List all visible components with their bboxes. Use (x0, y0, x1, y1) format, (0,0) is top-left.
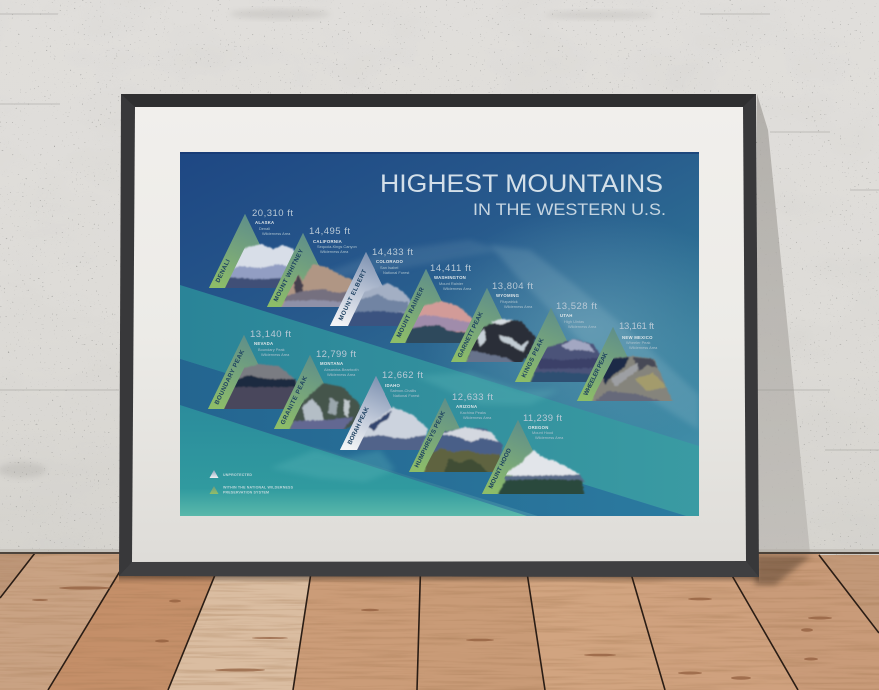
photo: Mount Elbert (346, 283, 411, 330)
photo: Granite Peak (288, 383, 360, 433)
stats: Borah Peak (382, 370, 423, 398)
stats: Mount Elbert: COLORADO (376, 259, 403, 264)
legend item: within the national wilderness preservation system (210, 486, 294, 494)
stats: Wheeler Peak: NEW MEXICO (622, 335, 653, 340)
label strip: Humphreys Peak: HUMPHREYS PEAK (414, 410, 447, 469)
photo: Humphreys Peak (423, 427, 503, 476)
stats: Denali: Denali (259, 226, 270, 231)
label strip: Mount Hood: MOUNT HOOD (488, 447, 513, 490)
stats: Mount Whitney: CALIFORNIA (313, 239, 342, 244)
stats: Granite Peak: Absaroka-Beartooth (324, 367, 359, 372)
stats: Mount Hood: Mount Hood (532, 430, 553, 435)
legend item: within the national wilderness preservation system: PRESERVATION SYSTEM (223, 490, 269, 494)
stats: Mount Hood: Wilderness Area (535, 435, 564, 440)
peak: Wheeler Peak (577, 321, 674, 405)
photo: Mount Hood (496, 450, 585, 498)
title: HIGHEST MOUNTAINS (380, 170, 663, 198)
stats: Boundary Peak: NEVADA (254, 341, 273, 346)
label strip: Boundary Peak: BOUNDARY PEAK (214, 348, 246, 406)
stats: Denali: Wilderness Area (262, 231, 291, 236)
stats: Denali (252, 208, 293, 236)
stats: Garnett Peak (492, 282, 533, 308)
stats: Borah Peak: National Forest (393, 393, 420, 398)
photo: Mount Rainier (405, 300, 472, 343)
stats: Mount Elbert: 14,433 ft (372, 247, 413, 258)
photo: Boundary Peak (222, 364, 297, 413)
white mat (132, 107, 746, 562)
stats: Mount Whitney: 14,495 ft (309, 226, 350, 237)
wooden floor planks (0, 552, 879, 690)
stats: Borah Peak: Salmon-Challis (390, 388, 416, 393)
peak: Mount Elbert (330, 247, 413, 330)
stats: Mount Rainier: 14,411 ft (430, 263, 471, 274)
peak: Garnett Peak (451, 281, 536, 366)
stats: Granite Peak: MONTANA (320, 361, 343, 366)
legend (210, 470, 294, 494)
label strip: Denali: DENALI (215, 258, 232, 284)
photo: Kings Peak (529, 339, 600, 386)
peak: Denali (209, 208, 297, 292)
stats: Wheeler Peak: Wheeler Peak (626, 340, 650, 345)
peak: Mount Rainier (390, 263, 475, 347)
stats: Granite Peak (316, 350, 358, 376)
stats: Humphreys Peak: 12,633 ft (452, 392, 493, 403)
stats: Garnett Peak: WYOMING (496, 293, 520, 298)
peak: Mount Hood (482, 413, 585, 498)
stats: Granite Peak: Wilderness Area (327, 372, 356, 377)
photo: Wheeler Peak (591, 356, 674, 405)
stats: Kings Peak (556, 302, 597, 328)
peak: Boundary Peak (208, 329, 297, 413)
stats: Mount Whitney: Sequoia-Kings Canyon (317, 244, 357, 249)
stats: Borah Peak: IDAHO (385, 383, 401, 388)
photo: Garnett Peak (465, 319, 536, 366)
stats: Boundary Peak: Boundary Peak (258, 347, 285, 352)
stats: Denali: 20,310 ft (252, 208, 293, 219)
stats: Boundary Peak: 13,140 ft (250, 329, 291, 340)
peak: Borah Peak (340, 370, 428, 454)
label strip: Garnett Peak: GARNETT PEAK (457, 310, 485, 359)
label strip: Granite Peak: GRANITE PEAK (280, 375, 309, 426)
stats: Mount Whitney (309, 226, 357, 254)
stats: Mount Hood: OREGON (528, 425, 549, 430)
stats: Mount Elbert: San Isabel (380, 265, 399, 270)
stats: Wheeler Peak: 13,161 ft (619, 321, 654, 332)
legend item: unprotected: UNPROTECTED (223, 473, 252, 477)
title (382, 174, 664, 215)
peak: Kings Peak (515, 301, 600, 386)
stats: Garnett Peak: Fitzpatrick (500, 299, 518, 304)
title: IN THE WESTERN U.S. (473, 200, 666, 219)
stats: Garnett Peak: 13,804 ft (492, 281, 533, 292)
stats: Mount Rainier: Wilderness Area (443, 286, 472, 291)
stats: Mount Hood: 11,239 ft (523, 413, 562, 424)
stats: Granite Peak: 12,799 ft (316, 349, 356, 360)
stats: Garnett Peak: Wilderness Area (504, 304, 533, 309)
stats: Mount Elbert: National Forest (383, 270, 410, 275)
photo: Borah Peak (354, 407, 428, 454)
label strip: Mount Whitney: MOUNT WHITNEY (273, 247, 306, 303)
label strip: Kings Peak: KINGS PEAK (521, 337, 546, 379)
stats: Humphreys Peak: Kachina Peaks (460, 410, 486, 415)
stats: Wheeler Peak (620, 322, 658, 349)
stats: Kings Peak: High Uintas (564, 319, 584, 324)
stats: Mount Rainier: WASHINGTON (434, 275, 466, 280)
stats: Kings Peak: Wilderness Area (568, 324, 597, 329)
legend item: within the national wilderness preservation system: WITHIN THE NATIONAL WILDERNESS (223, 486, 294, 490)
stats: Denali: ALASKA (255, 220, 274, 225)
poster background bands (180, 152, 699, 516)
stats: Kings Peak: 13,528 ft (556, 301, 597, 312)
stats: Kings Peak: UTAH (560, 313, 573, 318)
stats: Boundary Peak (250, 330, 291, 356)
stats: Mount Whitney: Wilderness Area (320, 249, 349, 254)
stats: Mount Elbert (372, 248, 413, 274)
stats: Mount Hood (523, 413, 564, 440)
stats: Boundary Peak: Wilderness Area (261, 352, 290, 357)
label strip: Wheeler Peak: WHEELER PEAK (583, 351, 610, 397)
peak: Mount Whitney (267, 226, 357, 311)
poster (180, 152, 699, 516)
stats: Mount Rainier (430, 264, 472, 290)
label strip: Borah Peak: BORAH PEAK (347, 405, 371, 446)
photo: Mount Whitney (281, 264, 352, 307)
stats: Borah Peak: 12,662 ft (382, 370, 423, 381)
label strip: Mount Rainier: MOUNT RAINIER (396, 286, 426, 339)
label strip: Mount Elbert: MOUNT ELBERT (338, 268, 368, 322)
stats: Humphreys Peak: ARIZONA (456, 404, 477, 409)
stats: Wheeler Peak: Wilderness Area (629, 345, 658, 350)
peak: Humphreys Peak (409, 392, 503, 476)
peak: Granite Peak (274, 349, 360, 433)
photo: Denali (225, 243, 294, 288)
stats: Humphreys Peak: Wilderness Area (463, 415, 492, 420)
stats: Mount Rainier: Mount Rainier (439, 281, 464, 286)
picture frame (119, 94, 759, 577)
stats: Humphreys Peak (452, 392, 493, 420)
